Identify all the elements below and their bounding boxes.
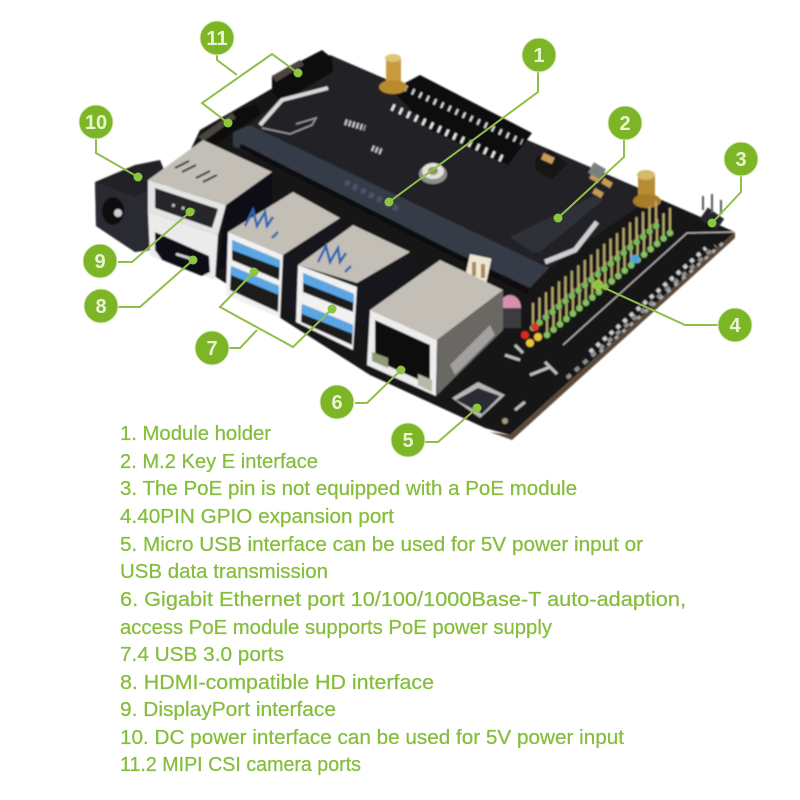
feature list: access PoE module supports PoE power supply [120,616,553,639]
module screw [419,164,447,184]
callout 6: Ethernet [320,366,406,419]
callout 5: micro USB: 5 [402,430,414,452]
feature list: 9. DisplayPort interface [120,698,336,721]
feature list: 5. Micro USB interface can be used for 5V power input or [120,533,643,556]
module board [250,55,655,268]
callout 1: module holder: 1 [533,45,545,67]
board silkscreen [505,345,557,410]
capacitor [499,295,521,321]
callout 9: DisplayPort [83,208,194,278]
callout 5: micro USB [391,404,482,457]
SMD parts [535,150,568,180]
GPIO header pins [547,208,670,335]
feature list: 2. M.2 Key E interface [120,450,318,473]
module holder strip [233,125,549,288]
M.2 slot card [510,195,603,252]
feature list: USB data transmission [120,560,328,583]
callout 1: module holder [384,38,556,206]
callout 11: MIPI CSI ports [200,21,302,128]
feature list: 4.40PIN GPIO expansion port [120,505,394,528]
feature list: 10. DC power interface can be used for 5V power input [120,726,624,749]
feature list: 8. HDMI-compatible HD interface [120,671,434,694]
PoE pins [700,208,724,230]
callout 4: GPIO [594,280,752,342]
bottom header pads [563,232,735,345]
feature list: 3. The PoE pin is not equipped with a PoE module [120,477,577,500]
feature list: 7.4 USB 3.0 ports [120,643,284,666]
callout 4: GPIO: 4 [729,315,741,337]
PCB base [150,55,735,435]
gold standoffs [386,58,401,86]
callout 6: Ethernet: 6 [331,392,343,414]
connector white [465,254,491,284]
header pins on module [392,75,532,165]
callout 8: HDMI [84,256,198,323]
feature list [120,422,686,776]
camera connectors [272,50,333,102]
callout 3: PoE pin [708,142,758,228]
callout 2: M.2 Key E [554,106,642,222]
DisplayPort [218,172,272,270]
callout 10: DC power: 10 [85,112,107,134]
Ethernet port [370,260,503,340]
callout 8: HDMI: 8 [95,296,107,318]
callout 2: M.2 Key E: 2 [619,113,631,135]
USB 3.0 stack right [352,252,410,350]
callout 10: DC power [79,105,142,182]
camera latch [260,88,328,125]
DC jack [95,160,165,252]
callout 7: USB 3.0 ports: 7 [206,338,218,360]
product photo: carrier board [95,50,735,440]
feature list: 6. Gigabit Ethernet port 10/100/1000Base-T auto-adaption, [120,588,686,611]
micro USB [452,382,505,418]
callout 11: MIPI CSI ports: 11 [206,28,228,50]
callout 3: PoE pin: 3 [735,149,747,171]
USB 3.0 stack left [282,218,340,318]
callout 9: DisplayPort: 9 [94,251,106,273]
HDMI [148,212,218,280]
callout 7: USB 3.0 ports [195,268,336,365]
feature list: 1. Module holder [120,422,271,445]
feature list: 11.2 MIPI CSI camera ports [120,753,361,776]
